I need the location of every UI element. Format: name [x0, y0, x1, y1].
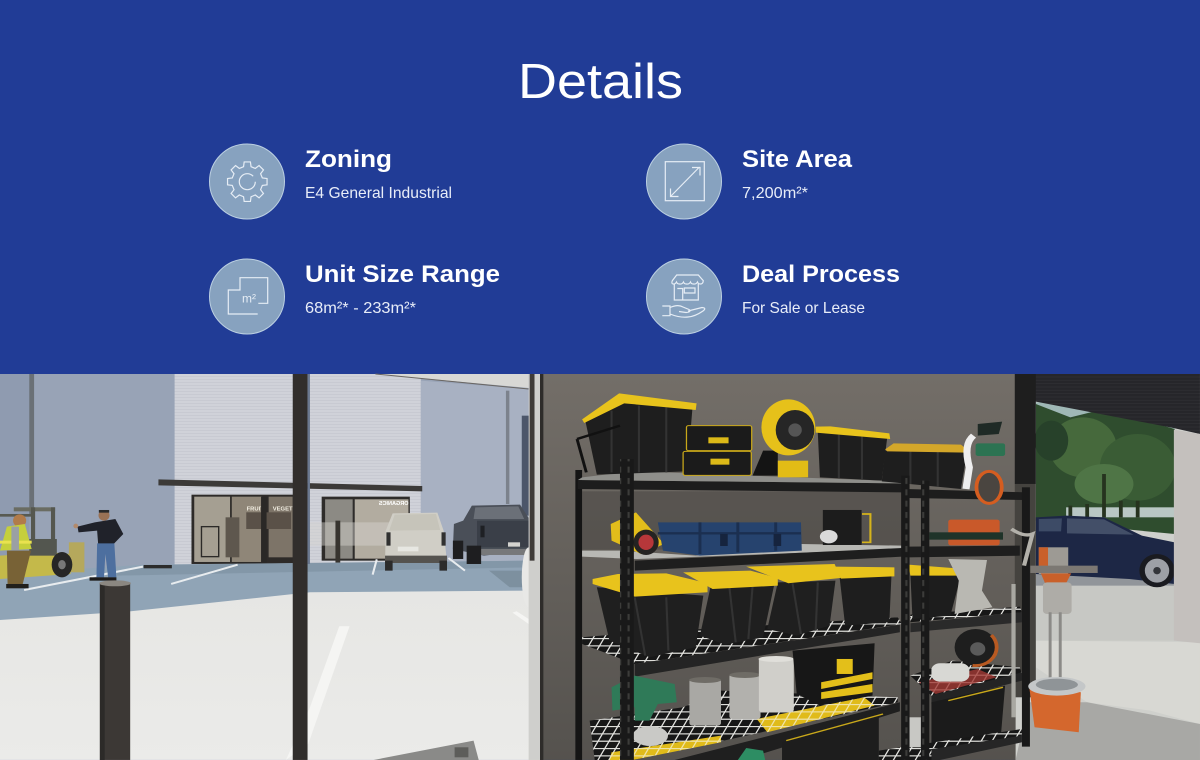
yellow and black tool chest — [793, 643, 875, 706]
icon: floor plan m2: m² — [242, 292, 256, 306]
worker in hi-vis vest — [0, 514, 32, 588]
bin: lower 3 — [746, 564, 841, 636]
man in dark jacket — [73, 510, 123, 581]
panel: zoning — [210, 144, 452, 219]
orange case — [929, 520, 1003, 545]
shopfront right: ORGANICS — [378, 501, 408, 507]
bin: top left — [577, 393, 697, 475]
navy car — [1036, 516, 1175, 587]
heading: deal process: Deal Process — [742, 261, 900, 288]
right bay lower shelf and kit — [879, 629, 1022, 760]
hanging tool — [1011, 529, 1032, 566]
clear bag and jar — [948, 559, 992, 614]
upright posts — [620, 459, 634, 760]
drawer case — [683, 426, 752, 475]
dark pickup truck — [453, 505, 529, 564]
heading: site area: Site Area — [742, 146, 853, 173]
blue tool case — [658, 522, 802, 556]
white pillar — [1174, 430, 1200, 643]
parked kerb item — [374, 741, 479, 760]
text: deal process value: For Sale or Lease — [742, 300, 865, 317]
parking lines — [24, 558, 465, 590]
roller door — [1035, 374, 1200, 434]
yellow cable reel — [611, 512, 664, 555]
battery unit — [820, 510, 870, 545]
title: Details — [518, 55, 683, 109]
shopfront left — [191, 495, 293, 567]
shelf level three front beam — [635, 625, 900, 677]
icon: gear — [210, 144, 284, 219]
bottom bin — [782, 717, 879, 760]
text: zoning value: E4 General Industrial — [305, 185, 452, 202]
shopfront left: VEGET — [273, 507, 293, 513]
wire shelf level three deck — [582, 617, 902, 664]
yellow fan — [753, 399, 815, 477]
cement mixer and bucket — [1028, 547, 1098, 732]
icon: floor plan m2 — [210, 259, 284, 334]
window mullion — [293, 374, 308, 760]
white cladding facade — [175, 374, 421, 566]
photo: storage shelving in warehouse unit — [540, 374, 1200, 760]
third shelf bins — [593, 559, 992, 657]
wall-mounted tools — [966, 422, 1005, 503]
bin: lower 1 — [593, 573, 708, 657]
photo: car park seen through glazing — [0, 374, 540, 760]
green power tool — [612, 676, 677, 746]
icon: shop on open hand — [646, 259, 722, 334]
white van — [385, 513, 447, 571]
text: unit size value: 68m²* - 233m²* — [305, 300, 416, 317]
forklift — [0, 507, 84, 579]
bin: lower 2 — [683, 571, 778, 645]
bin: lower 4 — [835, 567, 894, 626]
bin: top centre — [816, 426, 890, 481]
second shelf beams — [582, 544, 902, 559]
heading: unit size range: Unit Size Range — [305, 261, 500, 288]
opening to outside with trees and car — [1015, 374, 1200, 760]
panel: site area — [646, 144, 853, 219]
shopfront left: FRUIT — [247, 507, 264, 513]
bin: top right — [882, 443, 969, 489]
bollard — [99, 580, 131, 760]
panel: unit size range — [210, 259, 500, 334]
heading: zoning: Zoning — [305, 146, 392, 173]
canopy — [158, 479, 422, 491]
text: site area value: 7,200m²* — [742, 185, 808, 202]
bottom wire shelf — [590, 691, 898, 760]
panel: deal process — [646, 259, 900, 334]
header background panel — [0, 0, 1200, 374]
shelf back post left — [575, 470, 582, 760]
shaded wall behind second shelf — [582, 491, 904, 550]
shaded car park — [0, 561, 529, 620]
paint tins — [689, 656, 794, 726]
top shelf beams — [578, 480, 902, 492]
icon: diagonal arrow in square — [646, 144, 722, 219]
bin: lower far right — [908, 565, 965, 619]
shopfront right — [310, 497, 410, 565]
